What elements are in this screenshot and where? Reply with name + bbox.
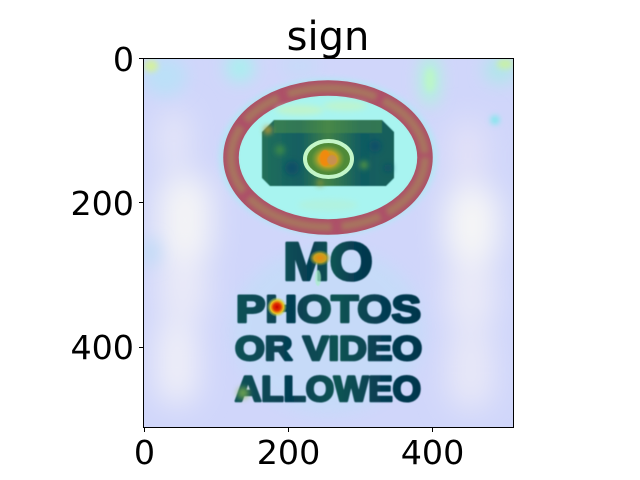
glow around the sign	[219, 78, 437, 236]
camera texture	[264, 126, 392, 186]
cool blobs along the top	[141, 54, 516, 266]
background wash	[144, 58, 514, 427]
ring mottling	[231, 88, 425, 227]
y tick labels: 400	[70, 328, 134, 367]
sign text line 1: MO	[283, 232, 373, 292]
y tick labels	[70, 40, 134, 367]
ticks	[139, 58, 432, 432]
yellow-green patches in ring interior	[276, 101, 367, 211]
x tick labels: 400	[401, 433, 464, 472]
axes frame	[144, 58, 514, 428]
heatmap image	[141, 54, 516, 427]
y tick labels: 0	[113, 40, 134, 79]
sign text line 3: OR VIDEO	[235, 330, 422, 368]
hot spot on PHOTOS	[267, 297, 287, 317]
sign ring	[231, 88, 425, 227]
x tick labels: 200	[257, 433, 320, 472]
sign text line 4: ALLOWEO	[235, 370, 421, 409]
title: sign	[287, 14, 369, 60]
hot spot on MO	[309, 250, 331, 266]
x tick labels: 0	[134, 433, 155, 472]
lens hot spot	[320, 150, 330, 166]
camera body	[262, 120, 394, 186]
warm spot on ALLOWEO	[237, 387, 249, 399]
camera lens ring	[305, 141, 352, 177]
chart figure: sign heatmap	[72, 20, 514, 464]
y tick labels: 200	[70, 184, 134, 223]
sign text line 2: PHOTOS	[236, 289, 421, 331]
pale blobs left and right	[156, 110, 499, 410]
x tick labels	[134, 433, 464, 472]
